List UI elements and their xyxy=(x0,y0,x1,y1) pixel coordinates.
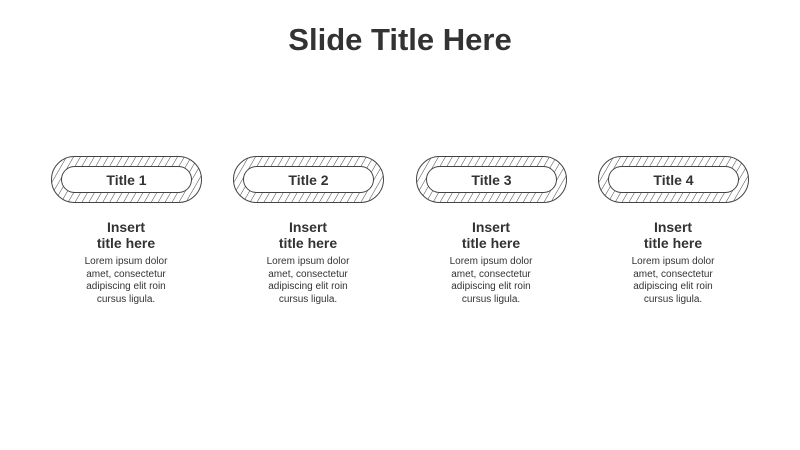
text 1: amet, consectetur xyxy=(86,268,166,280)
text 1: Lorem ipsum dolor xyxy=(85,256,167,267)
panel: step 3 xyxy=(416,156,567,304)
text 2: Lorem ipsum dolor xyxy=(267,256,349,267)
text 4 xyxy=(632,256,714,304)
heading 4 xyxy=(644,219,702,251)
heading 1 xyxy=(97,219,155,251)
heading 2: title here xyxy=(279,235,337,251)
pill: Title 3 xyxy=(416,156,567,203)
text 1: adipiscing elit roin xyxy=(86,281,166,292)
panel: step 2 xyxy=(233,156,384,304)
text 1 xyxy=(85,256,168,304)
text 2 xyxy=(267,256,350,304)
text 3: cursus ligula. xyxy=(462,294,520,304)
text 3: adipiscing elit roin xyxy=(451,281,531,292)
heading 2: Insert xyxy=(289,219,327,235)
text 1: cursus ligula. xyxy=(97,294,155,304)
heading 3: title here xyxy=(462,235,520,251)
text 3 xyxy=(450,256,532,304)
pill: Title 2 xyxy=(233,156,384,203)
heading 1: Insert xyxy=(107,219,145,235)
text 4: adipiscing elit roin xyxy=(633,281,713,292)
text 3: amet, consectetur xyxy=(451,268,531,280)
pill: Title 4: Title 4 xyxy=(653,172,694,188)
text 4: Lorem ipsum dolor xyxy=(632,256,714,267)
heading 4: title here xyxy=(644,235,702,251)
text 4: amet, consectetur xyxy=(633,268,713,280)
heading 1: title here xyxy=(97,235,155,251)
heading 4: Insert xyxy=(654,219,692,235)
pill: Title 1: Title 1 xyxy=(106,172,147,188)
panel: step 4 xyxy=(598,156,749,304)
text 2: adipiscing elit roin xyxy=(268,281,348,292)
pill: Title 3: Title 3 xyxy=(471,172,512,188)
heading 2 xyxy=(279,219,337,251)
pill: Title 2: Title 2 xyxy=(288,172,329,188)
heading 3 xyxy=(462,219,520,251)
heading 3: Insert xyxy=(472,219,510,235)
text 2: cursus ligula. xyxy=(279,294,337,304)
panel: step 1 xyxy=(51,156,202,304)
title: Slide Title Here xyxy=(288,22,512,57)
pill: Title 4 xyxy=(598,156,749,203)
text 3: Lorem ipsum dolor xyxy=(450,256,532,267)
text 4: cursus ligula. xyxy=(644,294,702,304)
text 2: amet, consectetur xyxy=(268,268,348,280)
pill: Title 1 xyxy=(51,156,202,203)
